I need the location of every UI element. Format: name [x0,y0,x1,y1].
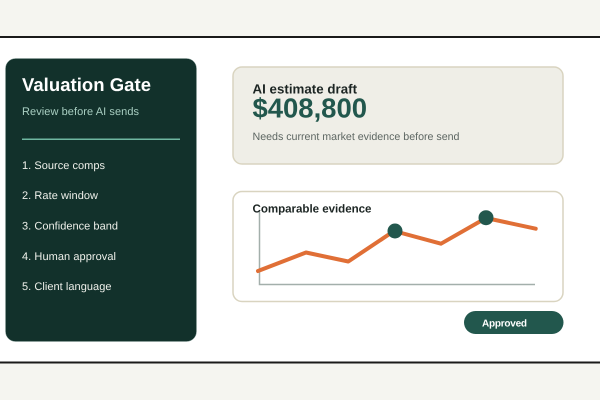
approved badge: Approved [482,319,527,330]
step list: 1. Source comps [22,160,106,172]
panel: comparable evidence [233,192,563,302]
data point [478,210,494,225]
estimate label: AI estimate draft [252,82,358,96]
line chart [258,218,536,271]
step list: 2. Rate window [22,190,98,202]
estimate value: $408,800 [252,92,367,123]
step list: 5. Client language [22,281,112,293]
chart heading: Comparable evidence [252,203,372,216]
panel: valuation gate sidebar [6,58,196,342]
data point [388,224,402,238]
approved badge [464,311,564,334]
estimate note: Needs current market evidence before send [252,131,460,143]
step list [22,160,118,293]
panel: AI estimate [233,67,563,164]
step list: 3. Confidence band [22,220,118,232]
subtitle: Review before AI sends [22,106,140,118]
step list: 4. Human approval [22,251,116,263]
chart axes [260,212,535,284]
heading: Valuation Gate: Valuation Gate [22,74,151,95]
